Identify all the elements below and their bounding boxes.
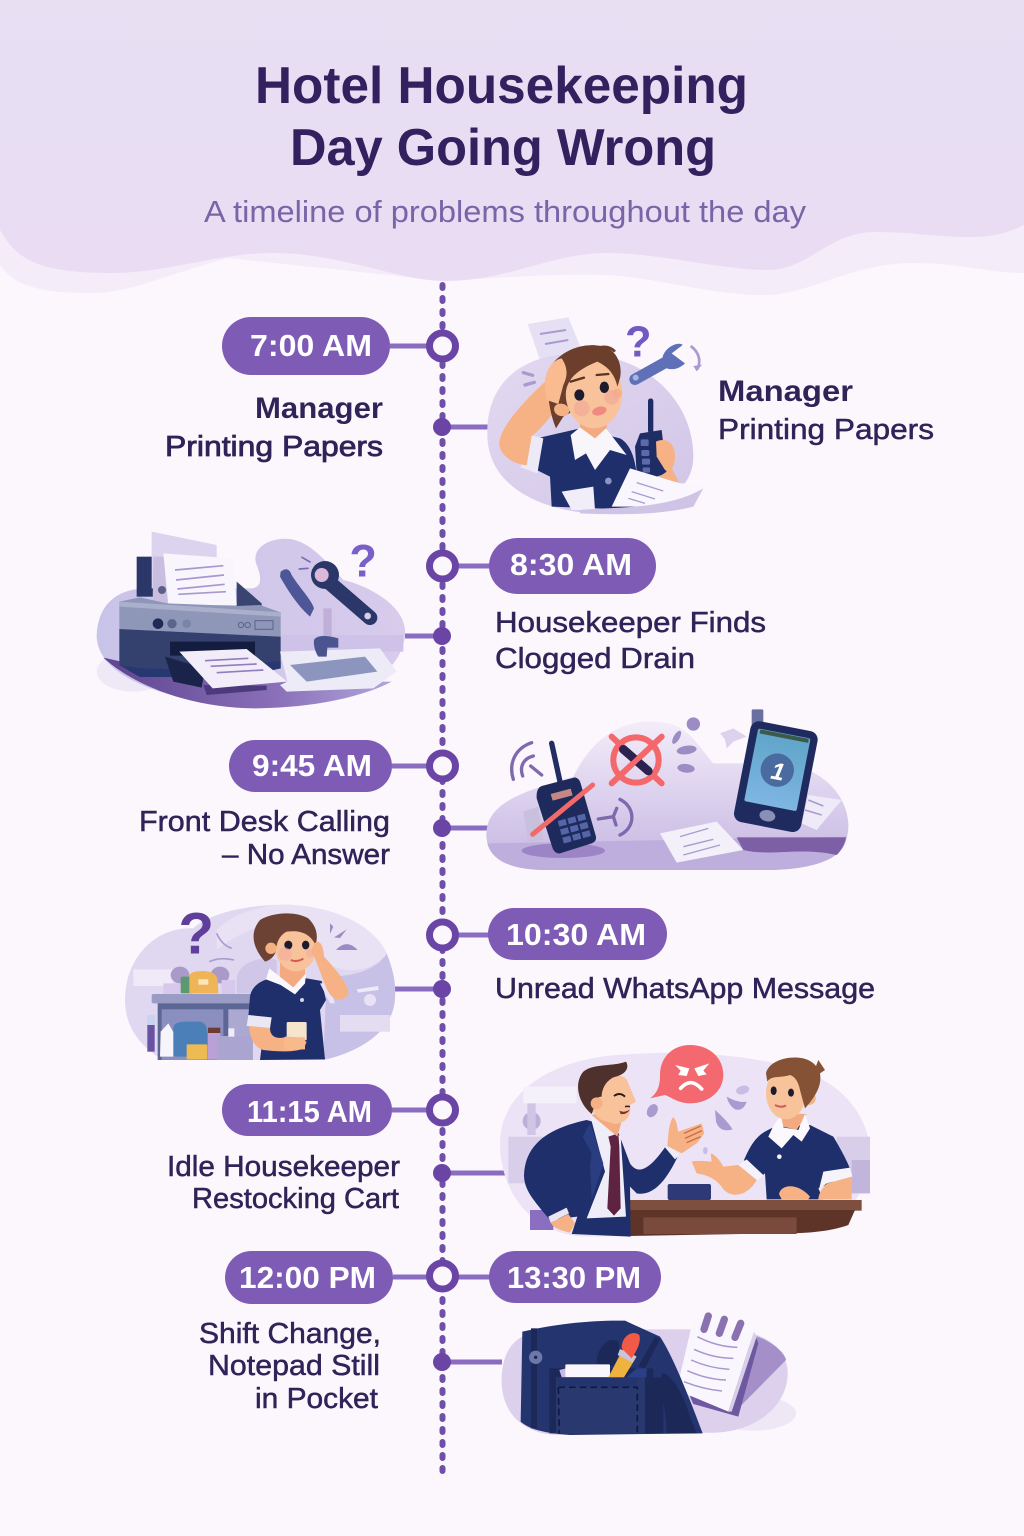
timeline spine <box>390 285 526 1476</box>
event 12:00 PM label: Shift Change, <box>199 1318 381 1350</box>
header wave banner <box>0 0 1024 295</box>
illustration: radio, blocked call and phone <box>486 709 848 870</box>
event 7:00 AM label left: Manager <box>255 392 383 425</box>
event 11:15 AM time pill: 11:15 AM <box>247 1094 372 1129</box>
title: Day Going Wrong <box>290 119 716 177</box>
event 12:00 PM label: in Pocket <box>255 1383 378 1415</box>
event 8:30 AM label: Clogged Drain <box>495 643 695 675</box>
illustration: stressed manager with radio <box>487 317 708 514</box>
event 9:45 AM label: – No Answer <box>222 839 390 871</box>
event 12:00 PM label <box>199 1318 381 1415</box>
illustration: radio, blocked call and phone: 1 <box>769 758 787 787</box>
illustration: printer and wrench: ? <box>349 536 377 587</box>
event 10:30 AM time pill <box>488 908 667 960</box>
event 12:00 PM label: Notepad Still <box>208 1350 380 1382</box>
event 11:15 AM label: Restocking Cart <box>192 1183 399 1215</box>
title <box>255 57 748 177</box>
title: Hotel Housekeeping <box>255 57 748 115</box>
event 7:00 AM label right <box>718 375 934 446</box>
event 10:30 AM time pill: 10:30 AM <box>506 917 646 952</box>
subtitle: A timeline of problems throughout the day <box>204 194 807 229</box>
illustration: manager arguing with housekeeper <box>500 1045 870 1237</box>
event 7:00 AM time pill <box>222 317 390 375</box>
event 8:30 AM label <box>495 607 766 675</box>
event 7:00 AM label right: Printing Papers <box>718 414 934 446</box>
illustration: puzzled housekeeper at cart: ? <box>178 901 214 966</box>
event 8:30 AM time pill: 8:30 AM <box>510 547 632 582</box>
event 10:30 AM label: Unread WhatsApp Message <box>495 973 875 1005</box>
illustration: puzzled housekeeper at cart <box>125 901 395 1060</box>
illustration: notepad and pencil in uniform pocket <box>502 1316 796 1435</box>
event 12:00 PM time pill <box>225 1251 393 1304</box>
event 9:45 AM label <box>139 806 390 871</box>
event 8:30 AM time pill <box>489 538 656 594</box>
event 7:00 AM label left <box>165 392 383 463</box>
event 7:00 AM label left: Printing Papers <box>165 431 383 463</box>
event 13:30 PM time pill: 13:30 PM <box>507 1260 641 1295</box>
illustration: stressed manager with radio: ? <box>625 319 651 367</box>
event 11:15 AM label <box>167 1151 400 1215</box>
illustration: printer and wrench <box>97 532 405 708</box>
event 12:00 PM time pill: 12:00 PM <box>239 1260 376 1295</box>
event 11:15 AM time pill <box>222 1084 392 1136</box>
event 7:00 AM label right: Manager <box>718 375 853 408</box>
event 9:45 AM time pill <box>229 740 392 792</box>
event 7:00 AM time pill: 7:00 AM <box>250 328 372 363</box>
event 13:30 PM time pill <box>489 1251 661 1303</box>
event 11:15 AM label: Idle Housekeeper <box>167 1151 400 1183</box>
event 9:45 AM label: Front Desk Calling <box>139 806 390 838</box>
event 8:30 AM label: Housekeeper Finds <box>495 607 766 639</box>
event 9:45 AM time pill: 9:45 AM <box>252 748 372 783</box>
